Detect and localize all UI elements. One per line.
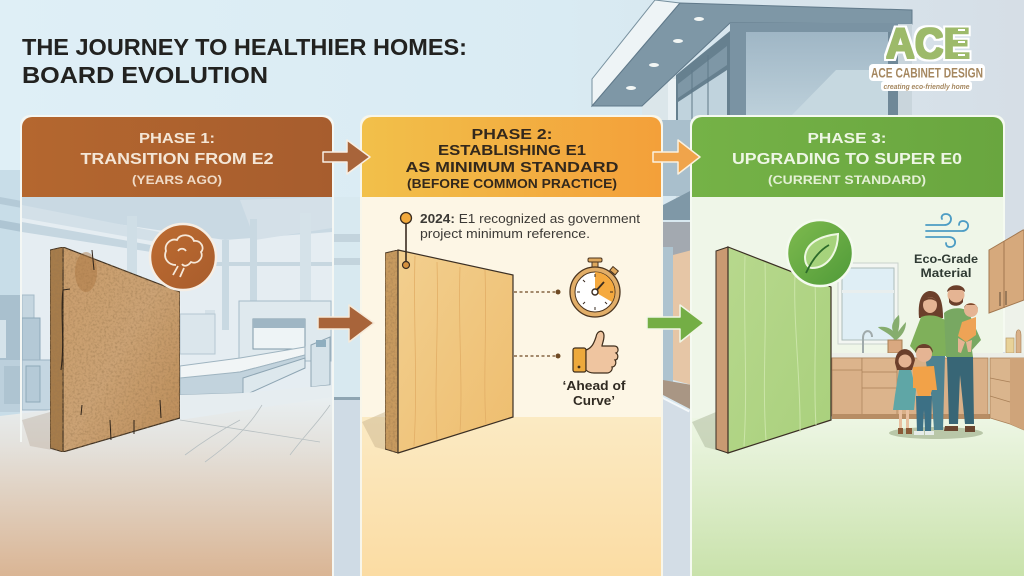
header: phase 2: PHASE 2: xyxy=(472,126,552,143)
gap strip between panels 1 and 2 xyxy=(332,197,362,576)
father xyxy=(944,285,981,432)
left strip of factory scene xyxy=(0,170,22,420)
factory scene xyxy=(0,197,332,576)
header: phase 1: PHASE 1: xyxy=(139,130,215,147)
header: phase 2: (BEFORE COMMON PRACTICE) xyxy=(407,176,617,191)
logo: Ace Cabinet Design: ACE xyxy=(886,20,970,68)
icon: stopwatch xyxy=(570,258,620,317)
header: phase 3: (CURRENT STANDARD) xyxy=(768,173,926,187)
arrow: phase 2 to phase 3 board xyxy=(647,305,704,342)
girl xyxy=(893,349,916,434)
header: phase 1: TRANSITION FROM E2 xyxy=(80,151,274,168)
building exterior xyxy=(592,0,912,200)
label: eco-grade material: Material xyxy=(920,266,972,280)
timeline note: 2024: project minimum reference. xyxy=(420,227,590,241)
connector: board to thumbs up xyxy=(514,354,560,358)
label: ahead of curve: ‘Ahead of xyxy=(562,379,626,393)
title: THE JOURNEY TO HEALTHIER HOMES: xyxy=(22,34,467,60)
boy xyxy=(913,344,937,435)
upper kitchen cabinets xyxy=(989,230,1024,313)
panel: phase 3 xyxy=(690,115,1024,576)
header: phase 2: ESTABLISHING E1 xyxy=(438,142,586,159)
board: E1 board xyxy=(362,250,513,453)
illustration: family xyxy=(889,285,983,439)
title: BOARD EVOLUTION xyxy=(22,62,268,88)
baby xyxy=(958,303,978,353)
label: ahead of curve xyxy=(562,379,626,408)
arrow: phase 2 to phase 3 header xyxy=(653,140,700,174)
gap strip between panels 2 and 3 xyxy=(661,120,692,576)
logo: Ace Cabinet Design: ACE CABINET DESIGN xyxy=(871,66,983,80)
header: phase 3: UPGRADING TO SUPER E0 xyxy=(732,151,962,168)
header: phase 3: PHASE 3: xyxy=(808,130,886,147)
connector: board to stopwatch xyxy=(514,290,560,294)
kitchen backsplash outside frame xyxy=(1005,300,1024,353)
arrow: phase 1 to phase 2 header xyxy=(323,140,370,174)
timeline note: 2024: 2024: E1 recognized as government xyxy=(420,212,641,226)
label: eco-grade material xyxy=(914,252,978,280)
icon: leaf xyxy=(787,220,853,286)
icon: emissions cloud xyxy=(150,224,216,290)
kitchen scene xyxy=(692,197,1024,576)
panel: phase 1 xyxy=(0,115,334,576)
mother xyxy=(910,291,947,430)
board: E2 particle board xyxy=(22,247,180,452)
header: phase 1: (YEARS AGO) xyxy=(132,173,222,187)
logo: Ace Cabinet Design: creating eco-friendly home xyxy=(884,82,970,91)
timeline note: 2024 xyxy=(400,212,641,268)
panel: phase 2 xyxy=(360,115,663,576)
header: phase 1 xyxy=(22,117,332,197)
board: super E0 board xyxy=(692,247,831,453)
arrow: phase 1 to phase 2 board xyxy=(318,305,374,342)
header: phase 2 xyxy=(362,117,661,197)
title xyxy=(22,34,467,88)
label: ahead of curve: Curve’ xyxy=(573,394,615,408)
header: phase 3 xyxy=(692,117,1003,197)
logo: Ace Cabinet Design xyxy=(869,20,985,91)
header: phase 2: AS MINIMUM STANDARD xyxy=(406,159,619,176)
label: eco-grade material: Eco-Grade xyxy=(914,252,978,266)
icon: thumbs up xyxy=(573,331,618,373)
icon: wind xyxy=(926,214,968,247)
